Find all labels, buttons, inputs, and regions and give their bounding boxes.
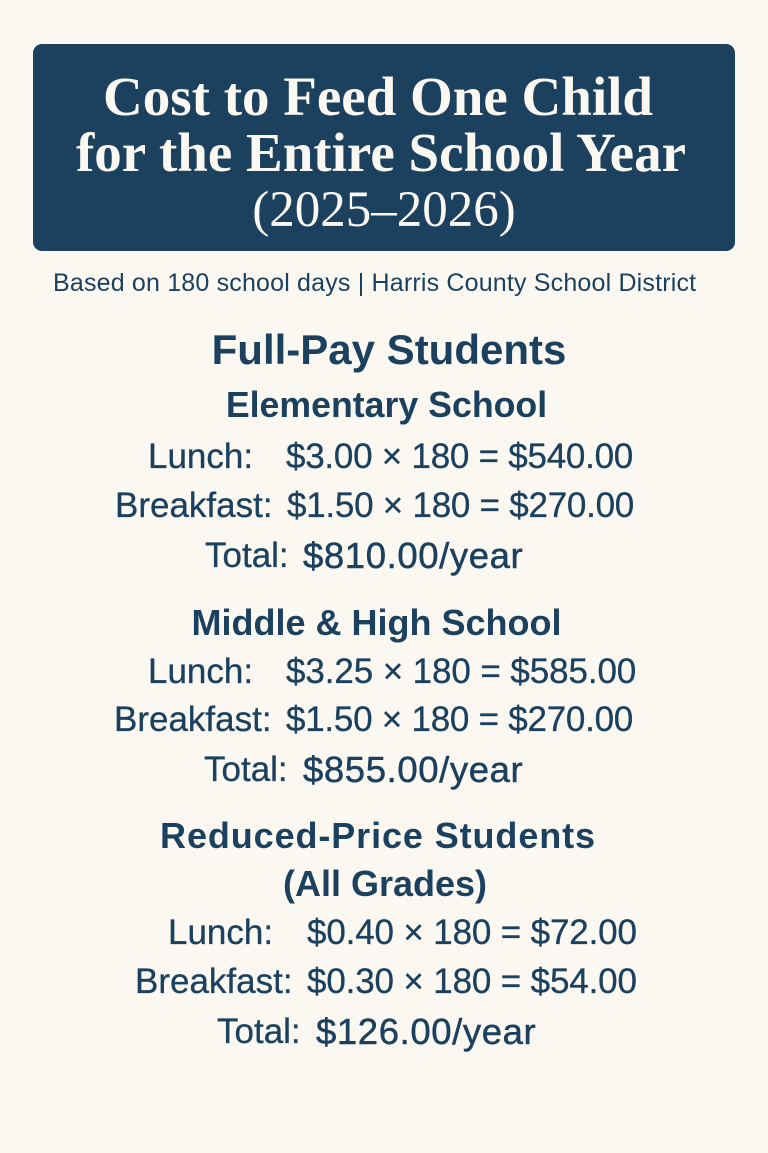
heading: full-pay students: Full-Pay Students — [212, 326, 566, 373]
title line 1: Cost to Feed One Child — [103, 66, 653, 127]
total value: $126.00/year — [316, 1011, 536, 1052]
total label: Total: — [217, 1012, 301, 1051]
breakfast calculation: $0.30 × 180 = $54.00 — [307, 962, 637, 1001]
breakfast label: Breakfast: — [135, 962, 293, 1001]
panel: elementary school — [115, 385, 634, 576]
breakfast calculation: $1.50 × 180 = $270.00 — [286, 700, 633, 739]
panel: reduced-price students — [135, 815, 637, 1052]
lunch label: Lunch: — [168, 913, 273, 952]
title banner — [33, 44, 735, 251]
heading line 2: (All Grades) — [283, 863, 487, 904]
total label: Total: — [204, 750, 288, 789]
total value: $855.00/year — [303, 749, 523, 790]
title line 2: for the Entire School Year — [76, 122, 686, 183]
lunch calculation: $3.25 × 180 = $585.00 — [286, 652, 636, 691]
title line 3: (2025–2026) — [252, 182, 516, 238]
heading line 1: Reduced-Price Students — [160, 815, 596, 856]
breakfast calculation: $1.50 × 180 = $270.00 — [287, 486, 634, 525]
heading: Elementary School — [226, 385, 547, 425]
panel: middle and high school — [114, 602, 636, 790]
subtitle: Based on 180 school days | Harris County School District — [53, 269, 696, 297]
lunch label: Lunch: — [148, 437, 253, 476]
total value: $810.00/year — [303, 535, 523, 576]
lunch calculation: $3.00 × 180 = $540.00 — [286, 437, 633, 476]
heading: Middle & High School — [192, 602, 561, 643]
breakfast label: Breakfast: — [115, 486, 273, 525]
total label: Total: — [205, 536, 289, 575]
breakfast label: Breakfast: — [114, 700, 272, 739]
lunch calculation: $0.40 × 180 = $72.00 — [307, 913, 637, 952]
lunch label: Lunch: — [148, 652, 253, 691]
